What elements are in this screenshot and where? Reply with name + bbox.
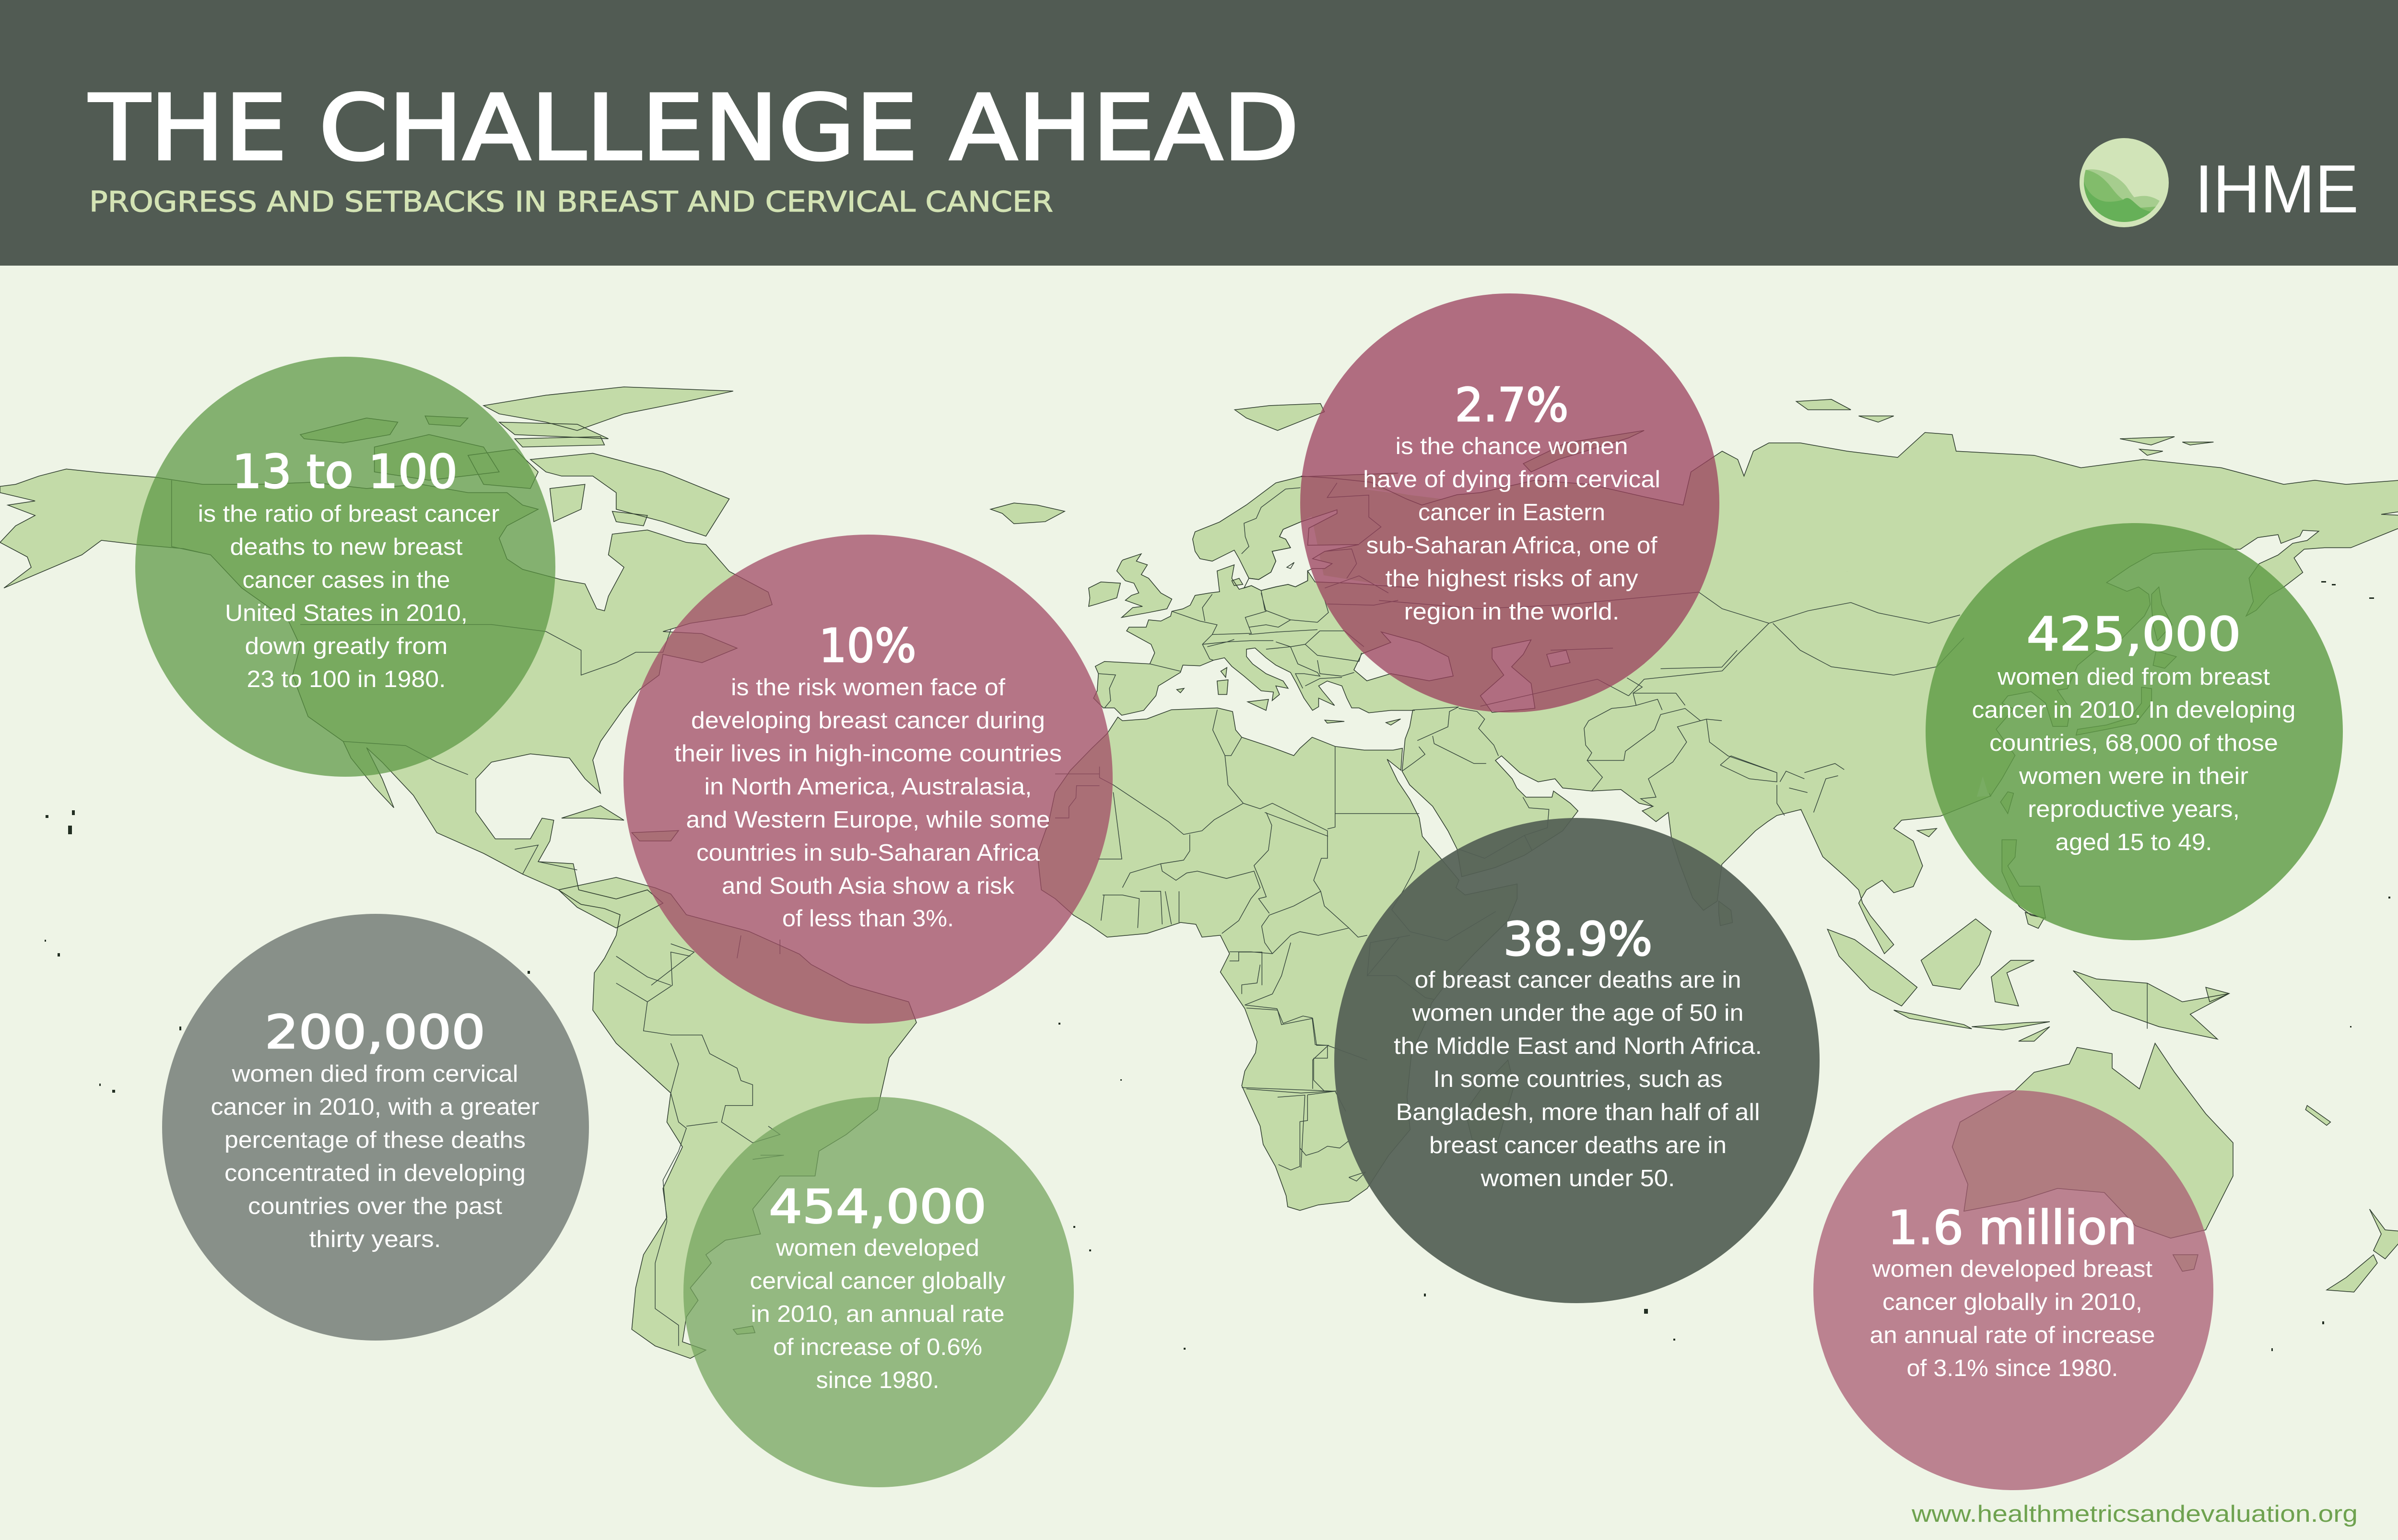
callout: 13 to 100: deaths to new breast: [230, 534, 463, 560]
callout: 10%: and South Asia show a risk: [722, 873, 1015, 899]
callout: 10%: and Western Europe, while some: [686, 807, 1050, 833]
callout: 2.7%: is the chance women: [1396, 433, 1628, 459]
logo: IHME: IHME: [2195, 151, 2359, 227]
callout: 38.9%: In some countries, such as: [1433, 1066, 1723, 1092]
callout: 2.7%: cancer in Eastern: [1418, 500, 1605, 525]
callout: 1.6 million: 1.6 million: [1888, 1201, 2137, 1255]
callout: 200,000: concentrated in developing: [224, 1160, 526, 1186]
callout: 10%: of less than 3%.: [782, 906, 954, 932]
callout: 425,000: women were in their: [2019, 763, 2248, 789]
callout: 454,000: women developed: [776, 1235, 979, 1261]
website url: www.healthmetricsandevaluation.org: [1911, 1501, 2358, 1527]
callout: 10%: 10%: [819, 619, 916, 673]
callout: 200,000: [162, 914, 589, 1341]
callout: 425,000: cancer in 2010. In developing: [1972, 697, 2295, 723]
callout: 13 to 100: 13 to 100: [232, 445, 458, 499]
callout: 454,000: in 2010, an annual rate: [751, 1301, 1004, 1327]
callout: 454,000: 454,000: [769, 1180, 987, 1234]
callout: 10%: countries in sub-Saharan Africa: [696, 840, 1040, 866]
callout: 2.7%: [1300, 293, 1719, 712]
callout: 1.6 million: cancer globally in 2010,: [1882, 1289, 2142, 1315]
callout: 38.9%: 38.9%: [1503, 912, 1653, 966]
callout: 1.6 million: of 3.1% since 1980.: [1907, 1355, 2118, 1381]
callout: 10%: is the risk women face of: [731, 675, 1005, 700]
callout: 454,000: since 1980.: [816, 1367, 939, 1393]
callout: 200,000: women died from cervical: [231, 1061, 518, 1087]
callout: 10%: in North America, Australasia,: [704, 774, 1032, 800]
callout: 1.6 million: women developed breast: [1872, 1256, 2152, 1282]
callout: 38.9%: breast cancer deaths are in: [1429, 1132, 1727, 1158]
callout: 38.9%: the Middle East and North Africa.: [1394, 1033, 1762, 1059]
title: THE CHALLENGE AHEAD: [89, 76, 1299, 181]
callout: 38.9%: women under 50.: [1480, 1166, 1675, 1191]
callout: 425,000: countries, 68,000 of those: [1989, 730, 2278, 756]
logo: IHME: [2080, 138, 2359, 233]
callout: 2.7%: 2.7%: [1455, 378, 1568, 432]
callout: 13 to 100: cancer cases in the: [243, 567, 450, 593]
callout: 10%: developing breast cancer during: [691, 708, 1045, 734]
callout: 38.9%: of breast cancer deaths are in: [1415, 967, 1741, 993]
callout: 13 to 100: [135, 357, 555, 777]
callout: 454,000: cervical cancer globally: [750, 1268, 1006, 1294]
callout: 200,000: thirty years.: [309, 1226, 441, 1252]
callout: 13 to 100: down greatly from: [245, 633, 448, 659]
subtitle: PROGRESS AND SETBACKS IN BREAST AND CERVICAL CANCER: [89, 185, 1053, 218]
callout: 13 to 100: 23 to 100 in 1980.: [247, 666, 446, 692]
callout: 1.6 million: [1813, 1090, 2213, 1490]
callout: 454,000: of increase of 0.6%: [773, 1334, 982, 1360]
callout: 425,000: women died from breast: [1997, 664, 2270, 690]
callout: 425,000: [1926, 523, 2343, 940]
callout: 200,000: percentage of these deaths: [224, 1127, 526, 1153]
callout: 38.9%: [1334, 818, 1820, 1303]
callout: 13 to 100: United States in 2010,: [225, 600, 468, 626]
callout: 13 to 100: is the ratio of breast cancer: [198, 501, 500, 527]
callout: 2.7%: region in the world.: [1404, 599, 1619, 625]
callout: 2.7%: have of dying from cervical: [1363, 467, 1660, 492]
world map: [0, 387, 2398, 1358]
callout: 38.9%: women under the age of 50 in: [1411, 1000, 1744, 1026]
callout: 425,000: aged 15 to 49.: [2056, 829, 2212, 855]
callout: 200,000: countries over the past: [248, 1193, 502, 1219]
callout: 200,000: cancer in 2010, with a greater: [211, 1094, 539, 1120]
callout: 2.7%: the highest risks of any: [1385, 566, 1638, 592]
callout: 425,000: 425,000: [2027, 607, 2241, 661]
callout: 1.6 million: an annual rate of increase: [1869, 1322, 2155, 1348]
callout: 454,000: [683, 1097, 1074, 1487]
callout: 200,000: 200,000: [265, 1005, 485, 1059]
callout: 10%: [623, 535, 1113, 1024]
callout: 10%: their lives in high-income countries: [674, 741, 1062, 767]
header band: [0, 0, 2398, 266]
callout: 2.7%: sub-Saharan Africa, one of: [1366, 533, 1657, 559]
callout: 425,000: reproductive years,: [2028, 796, 2240, 822]
callout: 38.9%: Bangladesh, more than half of all: [1396, 1099, 1760, 1125]
